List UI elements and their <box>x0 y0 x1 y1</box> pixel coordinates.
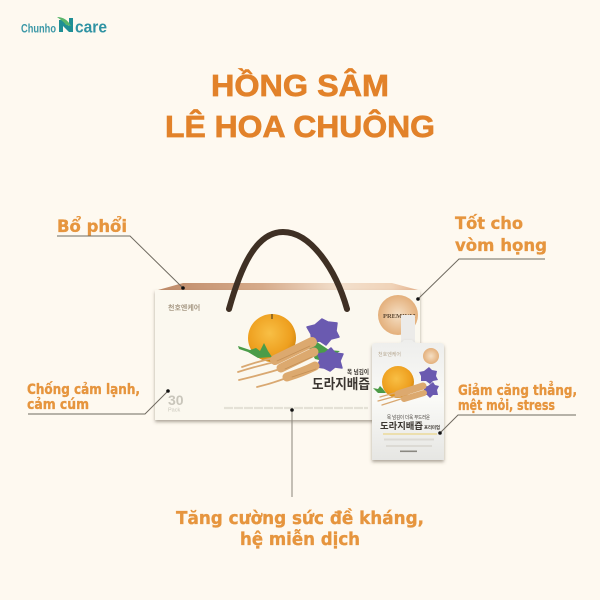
title <box>165 67 435 144</box>
pouch text: 도라지배즙 <box>380 420 423 431</box>
title: HỒNG SÂM <box>211 67 389 103</box>
box front <box>155 290 420 420</box>
pouch text: 목 넘김이 더욱 부드러운 <box>387 414 430 421</box>
callout: Tốt cho vòm họng: vòm họng <box>455 236 547 256</box>
callout: Bổ phổi: Bổ phổi <box>57 215 127 237</box>
box product name: 목 넘김이 <box>347 367 369 376</box>
callout: Giảm căng thẳng, mệt mỏi, stress: Giảm căng thẳng, <box>458 381 577 399</box>
callout: Chống cảm lạnh, cảm cúm <box>27 381 170 414</box>
box pack count: Pack <box>168 408 180 414</box>
illustration: pear, roots and flowers <box>238 314 343 387</box>
box product name: 도라지배즙 <box>312 376 370 392</box>
product: pouch <box>372 295 444 460</box>
pouch spout <box>401 315 415 345</box>
callout: Tăng cường sức đề kháng, hệ miễn dịch: Tăng cường sức đề kháng, <box>176 508 424 529</box>
pouch text <box>380 414 440 431</box>
callout: Chống cảm lạnh, cảm cúm: cảm cúm <box>27 397 89 413</box>
callout: Chống cảm lạnh, cảm cúm: Chống cảm lạnh, <box>27 381 140 398</box>
callout: Tốt cho vòm họng: Tốt cho <box>455 213 523 234</box>
logo: Chunho N care <box>21 17 107 36</box>
premium seal text: PREMIUM <box>383 313 416 320</box>
premium seal <box>378 295 418 335</box>
callout: Bổ phổi <box>57 215 185 290</box>
box product name <box>312 367 370 392</box>
callout: Tăng cường sức đề kháng, hệ miễn dịch: hệ miễn dịch <box>240 528 360 550</box>
product: gift box <box>155 232 420 420</box>
pouch body <box>372 340 444 460</box>
logo: Chunho N care: Chunho <box>21 24 56 36</box>
pouch fine print <box>383 433 437 452</box>
box brand: 천호엔케어 <box>168 303 200 312</box>
pouch brand: 천호엔케어 <box>378 351 401 358</box>
pouch text: 프리미엄 <box>424 424 440 431</box>
box top flap <box>158 283 418 290</box>
callout: Giảm căng thẳng, mệt mỏi, stress: mệt mỏi, stress <box>458 398 555 414</box>
pouch illustration <box>373 366 439 405</box>
box handle <box>229 232 347 309</box>
logo: Chunho N care: care <box>75 18 107 36</box>
pouch seal <box>423 348 439 364</box>
box pack count: 30 <box>168 392 184 408</box>
callout: Giảm căng thẳng, mệt mỏi, stress <box>438 381 577 435</box>
callout: Tăng cường sức đề kháng, hệ miễn dịch <box>176 408 424 550</box>
box fine print <box>224 407 368 409</box>
callout: Tốt cho vòm họng <box>416 213 547 301</box>
title: LÊ HOA CHUÔNG <box>165 108 435 144</box>
